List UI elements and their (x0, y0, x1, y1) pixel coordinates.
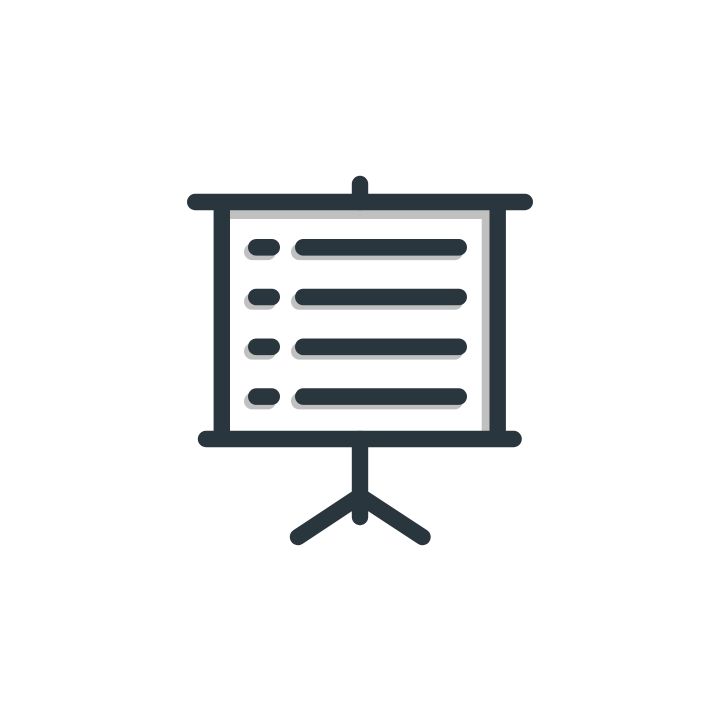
list row 2 (244, 289, 467, 310)
top bar (195, 194, 525, 210)
screen frame and stand (195, 184, 525, 537)
bottom bar (206, 431, 514, 447)
centre pole (352, 439, 368, 517)
list row 3 (244, 338, 467, 360)
right leg (360, 496, 422, 537)
top hanger (352, 184, 368, 202)
screen panel (222, 202, 498, 439)
left post (214, 202, 230, 439)
right post (490, 202, 506, 439)
left leg (298, 496, 360, 537)
list row 4 (244, 388, 467, 409)
list row 1 (244, 239, 467, 260)
